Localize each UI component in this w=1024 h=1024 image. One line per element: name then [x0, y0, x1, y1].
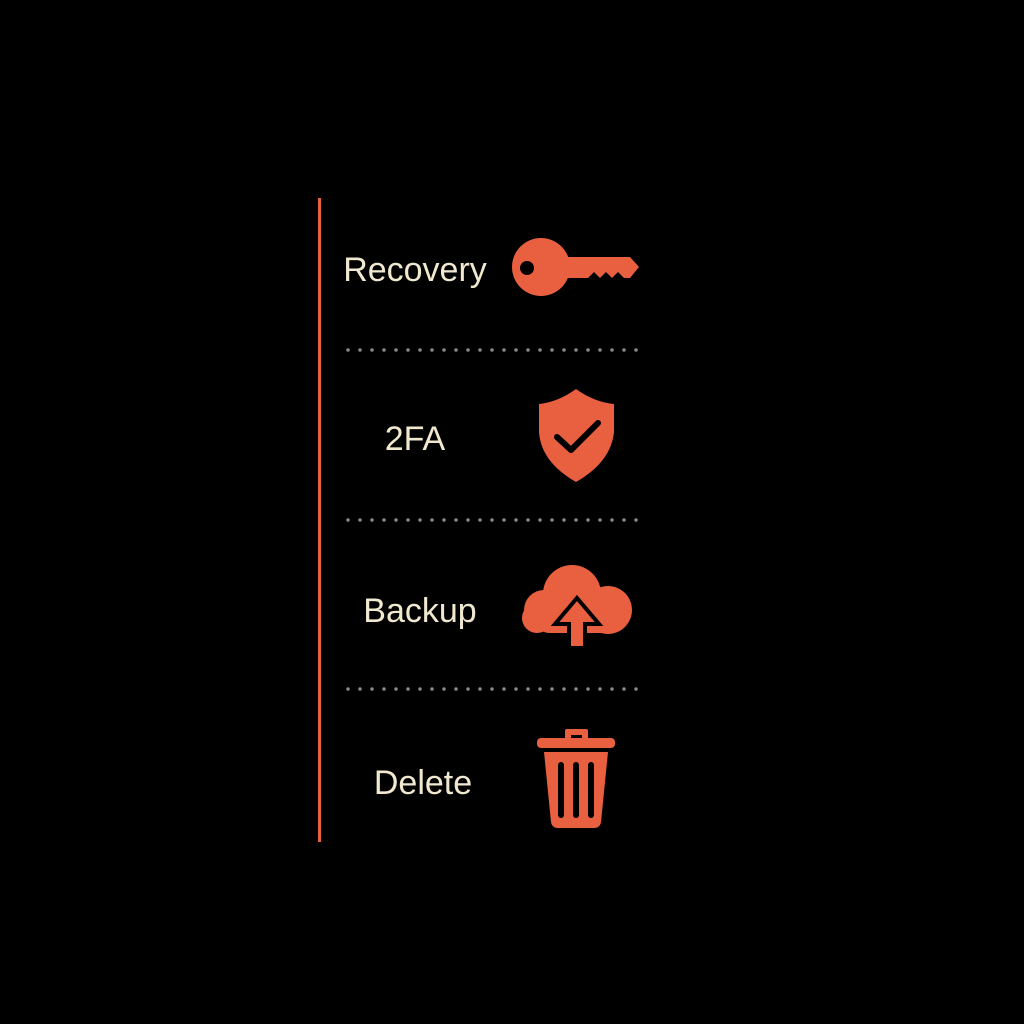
- icon: key: [512, 238, 639, 296]
- label: Delete: Delete: [374, 764, 472, 802]
- icon: cloud upload: [522, 565, 632, 648]
- icon: shield with check: [539, 389, 614, 482]
- row: Delete: [374, 729, 615, 828]
- vertical accent line: [318, 198, 321, 842]
- label: 2FA: 2FA: [385, 420, 446, 458]
- icon: trash can: [537, 729, 615, 828]
- row: Backup: [363, 565, 632, 648]
- label: Backup: Backup: [363, 592, 477, 630]
- label: Recovery: Recovery: [343, 251, 487, 289]
- row: Recovery: [343, 238, 639, 296]
- row: 2FA: [385, 389, 614, 482]
